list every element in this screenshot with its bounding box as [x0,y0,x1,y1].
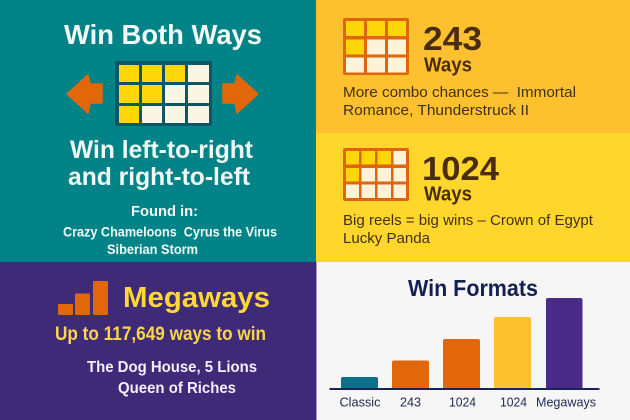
heading: megaways: Megaways [123,282,270,314]
bar chart [330,298,600,410]
panel: 1024 ways [316,133,630,262]
panel: win formats [316,262,630,420]
text: 243 description: More combo chances — Immortal [343,84,576,101]
heading: win both ways: Win Both Ways [64,19,262,50]
text: 1024 description: Lucky Panda [343,230,431,247]
heading: win formats: Win Formats [408,275,538,301]
icon: reel grid [115,61,212,126]
label: ways: Ways [424,54,472,76]
text: found in games [63,203,277,257]
number: 243: 243 [423,20,482,57]
chart labels: 1024 [500,396,527,410]
chart labels: 243 [400,396,421,410]
chart labels [340,396,596,410]
text: found in games: Siberian Storm [107,242,198,257]
text: found in games: Crazy Chameloons Cyrus the Virus [63,224,277,240]
label: ways: Ways [424,184,472,206]
subheading: ways to win: Up to 117,649 ways to win [55,324,266,345]
number: 1024: 1024 [422,150,500,187]
icon: right arrow [223,75,258,113]
panel: megaways [0,262,316,420]
panel: win both ways [0,0,316,262]
chart labels: Classic [340,396,380,410]
text: 1024 description [343,212,594,247]
panel: 243 ways [316,0,630,133]
subheading: direction [68,136,254,191]
text: megaways games: Queen of Riches [118,380,236,397]
icon: left arrow [67,75,102,113]
text: 243 description: Romance, Thunderstruck II [343,102,529,119]
text: 243 description [343,84,576,119]
icon: 3x3 grid [343,18,409,75]
chart labels: 1024 [449,396,476,410]
subheading: direction: and right-to-left [68,163,251,191]
icon: rising bars [58,281,108,315]
chart labels: Megaways [536,396,596,410]
icon: 4x3 grid [343,148,409,201]
text: megaways games [87,359,257,397]
text: found in games: Found in: [131,203,198,220]
text: megaways games: The Dog House, 5 Lions [87,359,257,376]
subheading: direction: Win left-to-right [70,136,254,164]
text: 1024 description: Big reels = big wins – Crown of Egypt [343,212,594,229]
